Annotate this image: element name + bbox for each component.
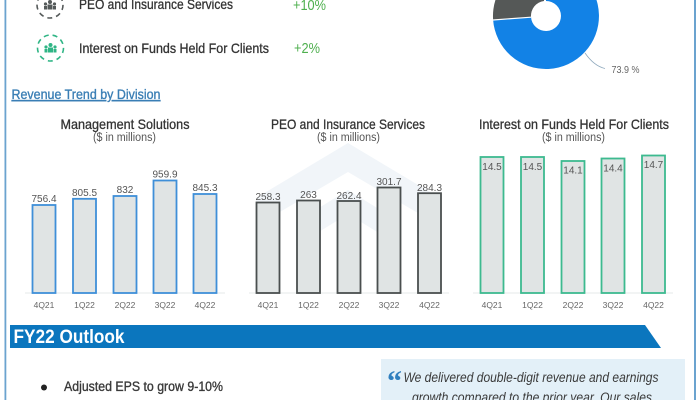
- chart: Management Solutions: 3Q22: [155, 300, 176, 310]
- callout: CEO quote: We delivered double-digit revenue and earnings: [404, 369, 658, 385]
- chart: PEO and Insurance Services: ($ in millions): [317, 132, 380, 144]
- watermark: house chevrons: [256, 143, 440, 246]
- chart: Management Solutions: ($ in millions): [93, 132, 156, 144]
- chart: PEO and Insurance Services: 263: [300, 190, 317, 201]
- chart: Interest on Funds Held For Clients: 14.5: [482, 162, 502, 173]
- chart: PEO and Insurance Services: 258.3: [255, 192, 281, 203]
- chart: Management Solutions: 4Q21: [34, 300, 55, 310]
- chart: Interest on Funds Held For Clients: [473, 116, 673, 310]
- chart: PEO and Insurance Services: 2Q22: [339, 300, 360, 310]
- chart: Management Solutions: 832: [117, 185, 134, 196]
- chart: PEO and Insurance Services: PEO and Insurance Services: [271, 116, 425, 132]
- chart: Interest on Funds Held For Clients: 4Q22: [643, 300, 664, 310]
- chart: Interest on Funds Held For Clients: 1Q22: [522, 300, 543, 310]
- chart: Interest on Funds Held For Clients: 3Q22: [603, 300, 624, 310]
- chart: Management Solutions: 959.9: [152, 170, 178, 180]
- chart: Management Solutions: 1Q22: [74, 300, 95, 310]
- banner: FY22 Outlook: [10, 325, 661, 348]
- donut chart: 73.9 %: [612, 65, 640, 76]
- chart: Management Solutions: 845.3: [192, 183, 218, 194]
- label: Interest on Funds Held For Clients: Interest on Funds Held For Clients: [79, 40, 269, 56]
- callout: CEO quote: “: [387, 365, 402, 398]
- chart: PEO and Insurance Services: 262.4: [336, 191, 362, 202]
- chart: Management Solutions: 805.5: [72, 188, 97, 199]
- chart: Management Solutions: [25, 116, 225, 310]
- bullet: Adjusted EPS: Adjusted EPS to grow 9-10%: [64, 379, 223, 394]
- chart: Interest on Funds Held For Clients: 14.4: [603, 164, 623, 174]
- chart: PEO and Insurance Services: 4Q22: [419, 300, 440, 310]
- banner: FY22 Outlook: FY22 Outlook: [14, 327, 125, 348]
- chart: PEO and Insurance Services: 3Q22: [379, 300, 400, 310]
- chart: PEO and Insurance Services: 4Q21: [258, 300, 279, 310]
- chart: Interest on Funds Held For Clients: 14.7: [644, 160, 664, 171]
- chart: PEO and Insurance Services: 301.7: [376, 177, 402, 188]
- chart: Management Solutions: 4Q22: [195, 300, 216, 310]
- chart: Management Solutions: Management Solutions: [60, 116, 190, 132]
- chart: Management Solutions: 2Q22: [115, 300, 136, 310]
- chart: Interest on Funds Held For Clients: 4Q21: [482, 300, 503, 310]
- donut chart: [493, 0, 640, 76]
- chart: PEO and Insurance Services: [249, 116, 449, 310]
- chart: PEO and Insurance Services: 284.3: [417, 183, 442, 194]
- chart: Interest on Funds Held For Clients: 14.5: [523, 162, 543, 173]
- chart: Interest on Funds Held For Clients: 14.1: [563, 166, 583, 176]
- icon: interest people dashed circle: [38, 35, 64, 61]
- chart: Interest on Funds Held For Clients: ($ in millions): [542, 132, 605, 144]
- icon: PEO people dashed circle: [37, 0, 63, 18]
- chart: PEO and Insurance Services: 1Q22: [298, 300, 319, 310]
- section heading: Revenue Trend by Division: Revenue Trend by Division: [12, 87, 160, 102]
- callout: CEO quote: [381, 359, 685, 400]
- change: +2%: +2%: [294, 40, 320, 57]
- chart: Interest on Funds Held For Clients: 2Q22: [563, 300, 584, 310]
- chart: Management Solutions: 756.4: [31, 194, 57, 205]
- chart: Interest on Funds Held For Clients: Interest on Funds Held For Clients: [479, 116, 669, 132]
